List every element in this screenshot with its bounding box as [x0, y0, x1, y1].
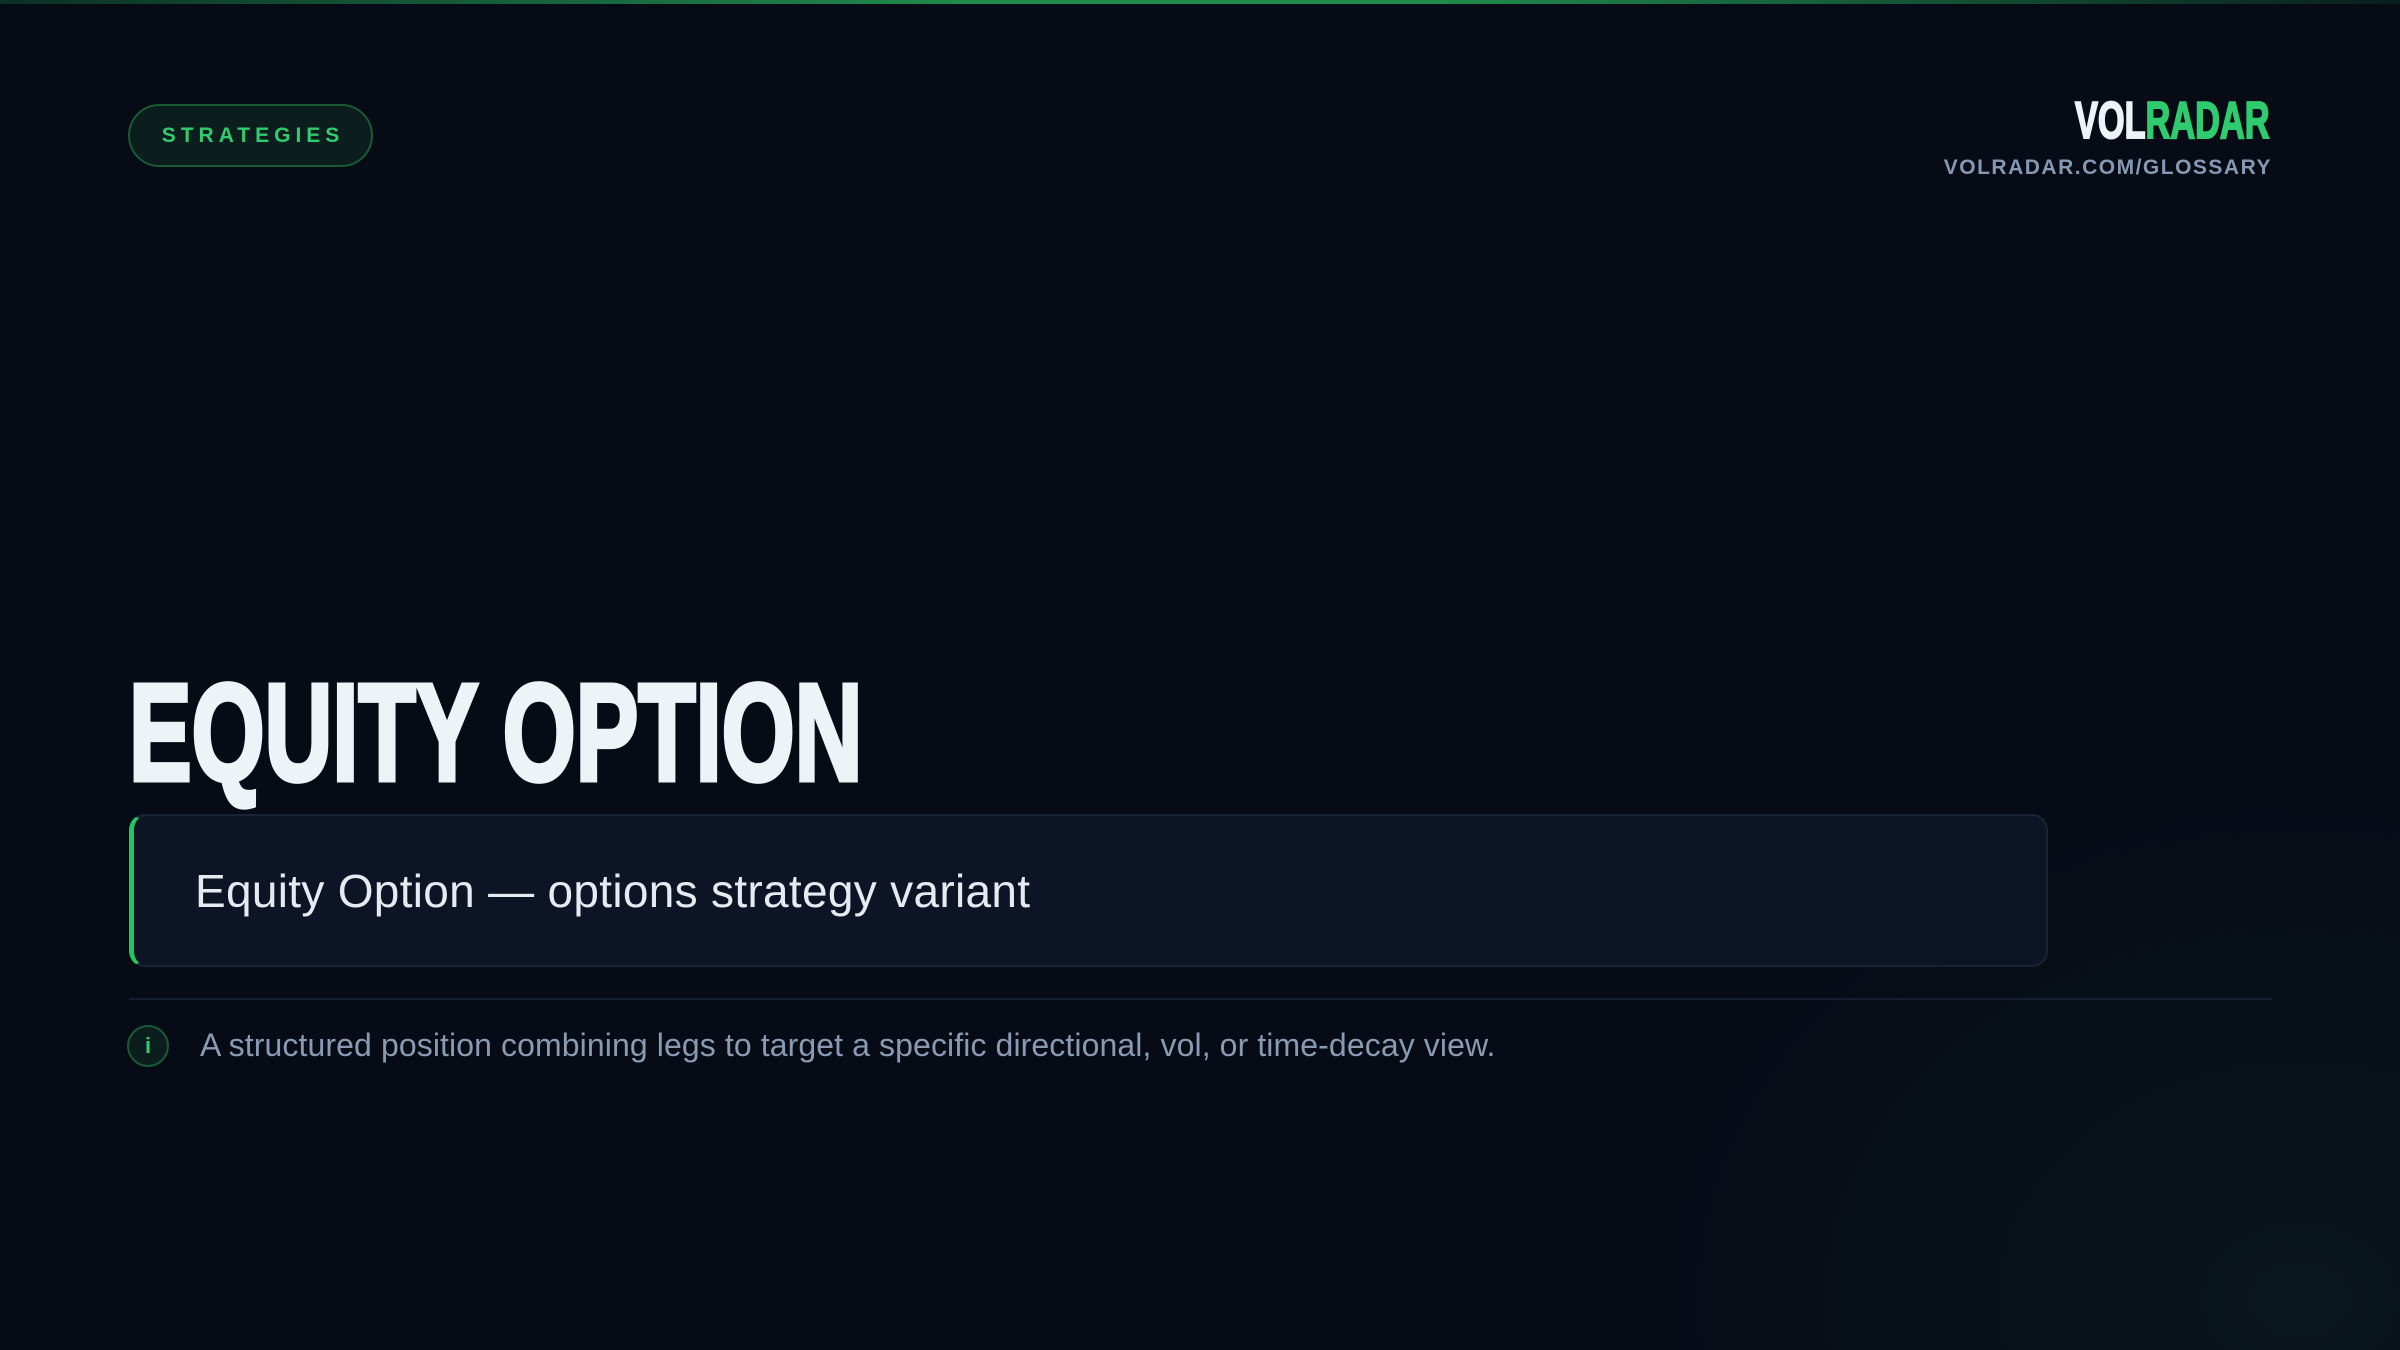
title: EQUITY OPTION — [129, 656, 862, 810]
category pill: STRATEGIES — [162, 124, 344, 146]
url: VOLRADAR.COM/GLOSSARY — [1944, 156, 2272, 179]
icon: info — [127, 1025, 169, 1067]
logo: VOLRADAR — [2075, 92, 2269, 150]
icon: info: i — [145, 1033, 151, 1058]
description text: A structured position combining legs to target a specific directional, vol, or time-decay view. — [200, 1027, 1495, 1063]
definition box: Equity Option — options strategy variant — [195, 865, 1030, 917]
category pill — [128, 104, 373, 167]
definition box — [129, 814, 2048, 967]
